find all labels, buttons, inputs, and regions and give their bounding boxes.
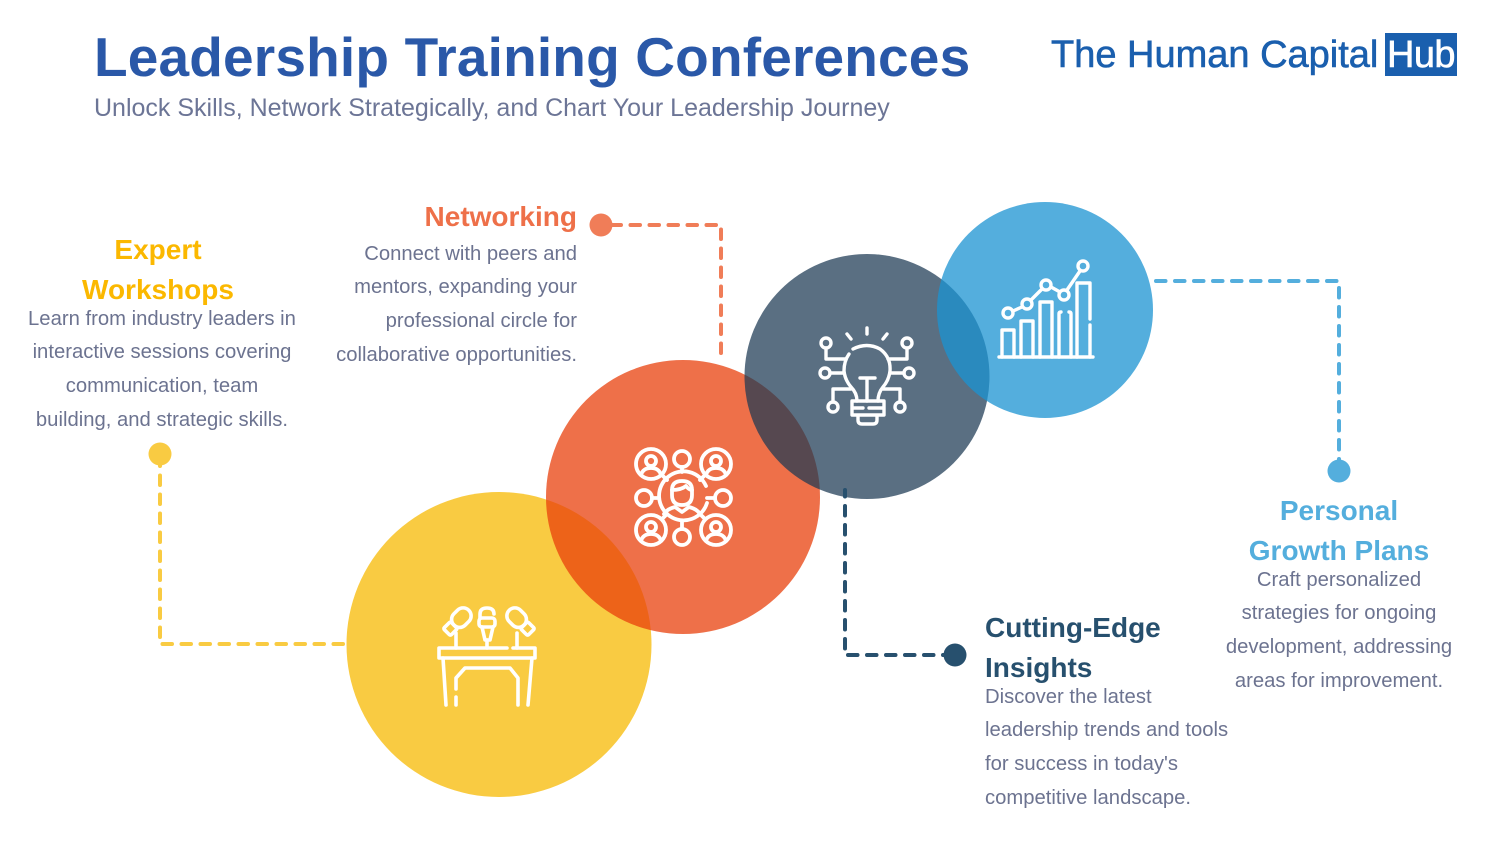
- description: Personal Growth Plans: development, addressing: [1226, 636, 1452, 658]
- text block: Expert Workshops: [28, 234, 296, 431]
- icon: podium with microphones: [439, 605, 537, 705]
- heading: Cutting-Edge Insights: [985, 612, 1161, 683]
- connector dot: yellow: [148, 442, 172, 466]
- description: Networking: [336, 242, 577, 366]
- heading: Personal Growth Plans: [1249, 495, 1429, 566]
- description: Cutting-Edge Insights: competitive landscape.: [985, 787, 1191, 809]
- text block: Cutting-Edge Insights: [985, 612, 1228, 809]
- heading: Cutting-Edge Insights: Cutting-Edge: [985, 612, 1161, 643]
- logo: The Human Capital Hub: Hub: [1387, 34, 1455, 76]
- description: Personal Growth Plans: areas for improvement.: [1235, 670, 1443, 692]
- description: Cutting-Edge Insights: Discover the latest: [985, 686, 1152, 708]
- description: Expert Workshops: [28, 308, 296, 431]
- connector dot: blue: [1328, 460, 1350, 482]
- description: Personal Growth Plans: strategies for ongoing: [1242, 602, 1436, 624]
- heading: Expert Workshops: [82, 234, 234, 305]
- description: Networking: mentors, expanding your: [354, 276, 577, 298]
- description: Personal Growth Plans: [1226, 568, 1452, 692]
- icon: people network: [636, 449, 731, 545]
- circle: blue: [937, 202, 1153, 418]
- description: Expert Workshops: communication, team: [66, 375, 258, 397]
- circle: orange: [546, 360, 820, 634]
- circle: dark slate: [744, 254, 990, 499]
- connector: dark: [845, 490, 955, 655]
- heading: Personal Growth Plans: Growth Plans: [1249, 535, 1429, 566]
- subtitle: Unlock Skills, Network Strategically, and Chart Your Leadership Journey: [94, 94, 890, 122]
- description: Expert Workshops: building, and strategic skills.: [36, 409, 288, 431]
- description: Networking: Connect with peers and: [364, 242, 577, 264]
- description: Expert Workshops: Learn from industry leaders in: [28, 308, 296, 330]
- title: Leadership Training Conferences: [94, 26, 970, 88]
- heading: Networking: Networking: [425, 201, 577, 232]
- text block: Networking: [336, 201, 577, 366]
- heading: Cutting-Edge Insights: Insights: [985, 652, 1092, 683]
- description: Cutting-Edge Insights: leadership trends and tools: [985, 719, 1228, 741]
- text block: Personal Growth Plans: [1226, 495, 1452, 692]
- icon: rising bar chart: [999, 261, 1093, 357]
- connector: orange: [601, 225, 721, 361]
- description: Expert Workshops: interactive sessions covering: [33, 341, 291, 363]
- connector dot: dark: [944, 644, 966, 666]
- description: Networking: collaborative opportunities.: [336, 344, 577, 366]
- connector dot: orange: [590, 214, 612, 236]
- icon: light bulb with circuit nodes: [820, 328, 914, 424]
- connector: blue: [1153, 281, 1339, 471]
- heading: Expert Workshops: Expert: [114, 234, 202, 265]
- description: Cutting-Edge Insights: [985, 686, 1228, 809]
- description: Personal Growth Plans: Craft personalized: [1257, 568, 1421, 590]
- heading: Expert Workshops: Workshops: [82, 274, 234, 305]
- description: Networking: professional circle for: [386, 310, 577, 332]
- circle: yellow: [346, 492, 652, 797]
- heading: Personal Growth Plans: Personal: [1280, 495, 1398, 526]
- logo: The Human Capital Hub: The Human Capital: [1051, 34, 1378, 76]
- connector: yellow: [160, 454, 345, 644]
- description: Cutting-Edge Insights: for success in today's: [985, 753, 1178, 775]
